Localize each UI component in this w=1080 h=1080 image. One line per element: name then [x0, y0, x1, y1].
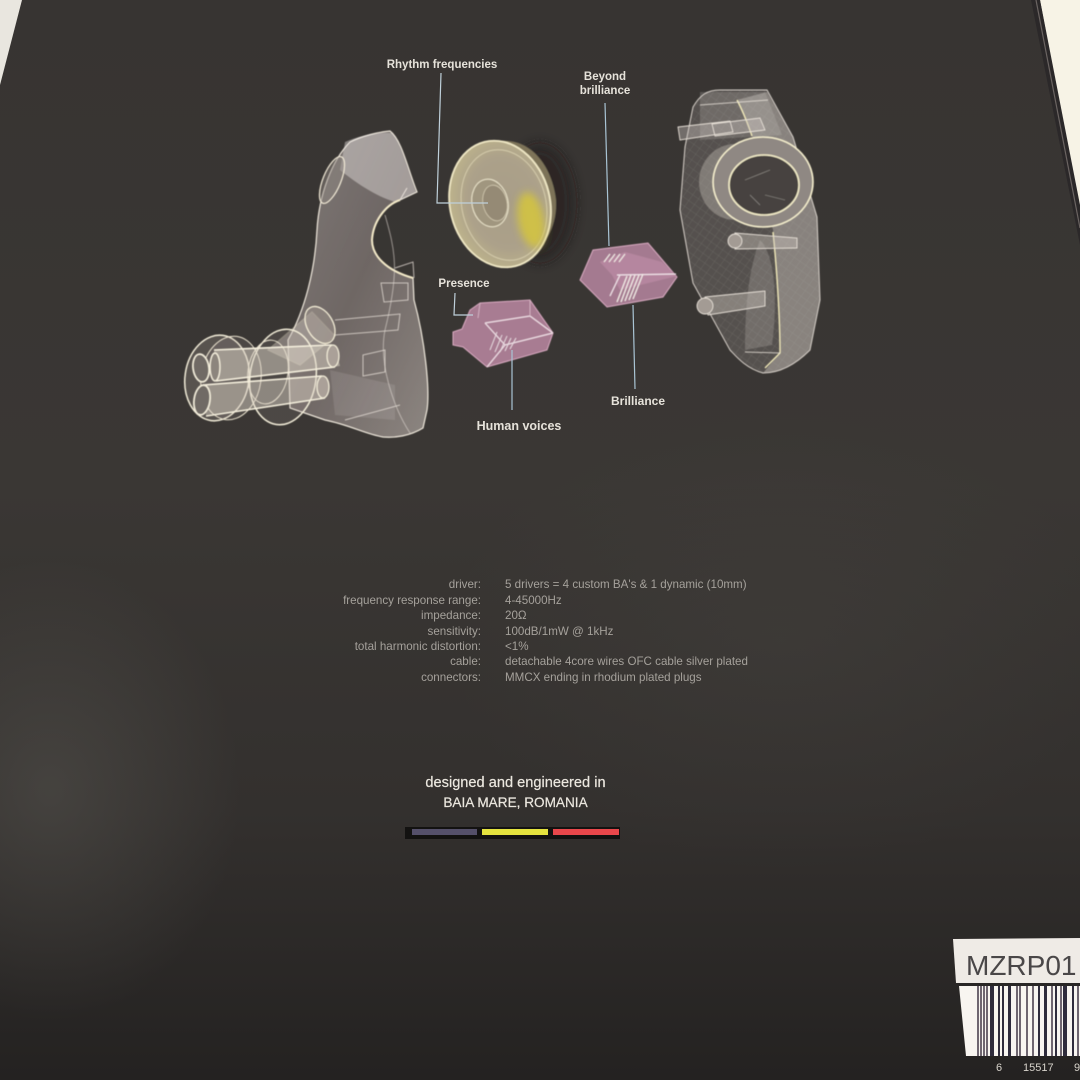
spec names: driver:: [449, 578, 481, 591]
spec names: impedance:: [421, 609, 481, 622]
leader line: presence: [454, 293, 473, 315]
leader line: human voices: [511, 350, 513, 410]
origin statement: designed and engineered in: [425, 775, 606, 791]
product code: MZRP01: [966, 950, 1076, 981]
leader line: brilliance: [633, 305, 635, 389]
label: brilliance: Brilliance: [611, 394, 665, 408]
left shell with sound tubes: [179, 131, 428, 437]
diagram: exploded earphone: [179, 90, 820, 437]
leader line: rhythm frequencies: [437, 73, 488, 203]
spec values: 20Ω: [505, 609, 527, 622]
label: human voices: Human voices: [477, 419, 561, 433]
driver: brilliance and beyond brilliance: [580, 243, 677, 307]
label: rhythm frequencies: Rhythm frequencies: [387, 59, 497, 71]
label: presence: Presence: [438, 278, 490, 290]
barcode: [959, 986, 1080, 1056]
sticker background: [953, 938, 1080, 983]
spec values: 5 drivers = 4 custom BA's & 1 dynamic (10mm): [505, 578, 747, 591]
driver: presence and human voices: [453, 300, 553, 367]
barcode digits: 9: [1074, 1062, 1080, 1074]
spec values: <1%: [505, 640, 529, 653]
origin statement: BAIA MARE, ROMANIA: [443, 795, 589, 810]
spec names: cable:: [450, 655, 481, 668]
barcode digits: 15517: [1023, 1062, 1054, 1074]
label: beyond brilliance: brilliance: [580, 85, 630, 97]
spec values: 100dB/1mW @ 1kHz: [505, 625, 614, 638]
barcode digits: 6: [996, 1062, 1002, 1074]
dynamic driver: [436, 130, 576, 278]
spec names: connectors:: [421, 671, 481, 684]
spec values: 4-45000Hz: [505, 594, 562, 607]
spec values: detachable 4core wires OFC cable silver plated: [505, 655, 748, 668]
specifications table: [343, 578, 748, 684]
label: beyond brilliance: Beyond: [584, 71, 626, 83]
spec values: MMCX ending in rhodium plated plugs: [505, 671, 702, 684]
product sticker: [953, 938, 1080, 1074]
Romanian flag bar: [405, 827, 620, 839]
spec names: total harmonic distortion:: [355, 640, 481, 653]
leader line: beyond brilliance: [605, 103, 609, 246]
right shell: [678, 90, 820, 373]
spec names: frequency response range:: [343, 594, 481, 607]
spec names: sensitivity:: [428, 625, 481, 638]
